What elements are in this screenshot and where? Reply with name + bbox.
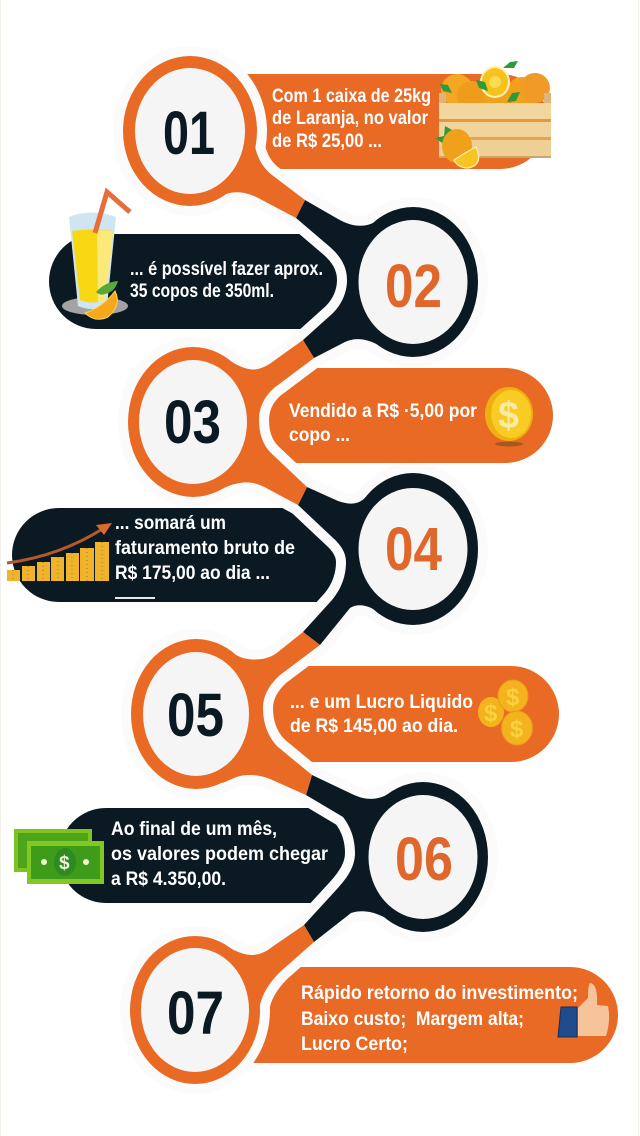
- text block 03: Vendido a R$ ·5,00 por: [289, 401, 478, 422]
- panel: text pill 06: [59, 808, 352, 903]
- text block 05: ... e um Lucro Liquido: [290, 692, 473, 713]
- panel: text pill 01: [200, 74, 548, 169]
- text block 01: de R$ 25,00 ...: [272, 131, 382, 152]
- panel: text pill 04: [12, 508, 345, 602]
- panel: text pill 05: [240, 666, 559, 762]
- timeline node 07: [130, 925, 314, 1084]
- text block 06: Ao final de um mês,: [111, 819, 277, 840]
- icon: rising coin stacks with arrow: [7, 523, 112, 581]
- panel: text pill 02: [49, 234, 345, 329]
- icon: three coins: [478, 680, 532, 745]
- icon: glass of juice: [62, 192, 130, 319]
- white halos around the timeline: [123, 56, 488, 1084]
- number 06: 06: [395, 825, 453, 893]
- text block 02: 35 copos de 350ml.: [130, 281, 274, 302]
- icon: banknotes: $: [59, 853, 70, 874]
- text block 02: [130, 259, 323, 302]
- icon: banknotes: [14, 829, 104, 884]
- timeline node 02: [296, 200, 478, 358]
- icon: coin: [485, 387, 533, 446]
- icon: three coins: $: [506, 684, 520, 711]
- text block 07: Baixo custo; Margem alta;: [301, 1009, 524, 1030]
- icon: coin: $: [498, 395, 519, 437]
- panel: text pill 03: [240, 368, 553, 463]
- text block 01: de Laranja, no valor: [272, 108, 429, 129]
- text block 02: ... é possível fazer aprox.: [130, 259, 323, 280]
- number 05: 05: [167, 681, 224, 749]
- timeline node 05: [131, 632, 320, 795]
- icon: three coins: $: [510, 716, 524, 743]
- number 04: 04: [385, 515, 442, 583]
- number 03: 03: [164, 388, 221, 456]
- text block 06: [111, 819, 329, 890]
- text block 04: R$ 175,00 ao dia ...: [115, 563, 270, 584]
- text block 03: copo ...: [289, 425, 350, 446]
- text block 01: Com 1 caixa de 25kg: [272, 86, 431, 107]
- text block 03: [289, 401, 478, 446]
- panel: text pill 07: [240, 967, 618, 1063]
- number 01: 01: [163, 99, 215, 167]
- timeline node 04: [298, 473, 478, 645]
- text block 04: faturamento bruto de: [115, 538, 295, 559]
- text block 04: ... somará um: [115, 513, 226, 534]
- timeline node 03: [128, 340, 314, 505]
- text block 01: [272, 86, 431, 152]
- number 02: 02: [385, 252, 442, 320]
- text block 07: [301, 983, 578, 1055]
- text block 06: os valores podem chegar: [111, 844, 329, 865]
- text block 05: [290, 692, 473, 737]
- timeline node 06: [304, 775, 488, 942]
- icon: three coins: $: [484, 700, 498, 727]
- text block 04: [115, 513, 295, 599]
- timeline node 01: [123, 56, 305, 218]
- text block 07: Lucro Certo;: [301, 1034, 408, 1055]
- text block 05: de R$ 145,00 ao dia.: [290, 716, 458, 737]
- icon: thumbs up: [558, 983, 609, 1037]
- icon: crate of oranges: [435, 61, 551, 168]
- text block 07: Rápido retorno do investimento;: [301, 983, 578, 1004]
- number 07: 07: [167, 979, 224, 1047]
- text block 06: a R$ 4.350,00.: [111, 869, 226, 890]
